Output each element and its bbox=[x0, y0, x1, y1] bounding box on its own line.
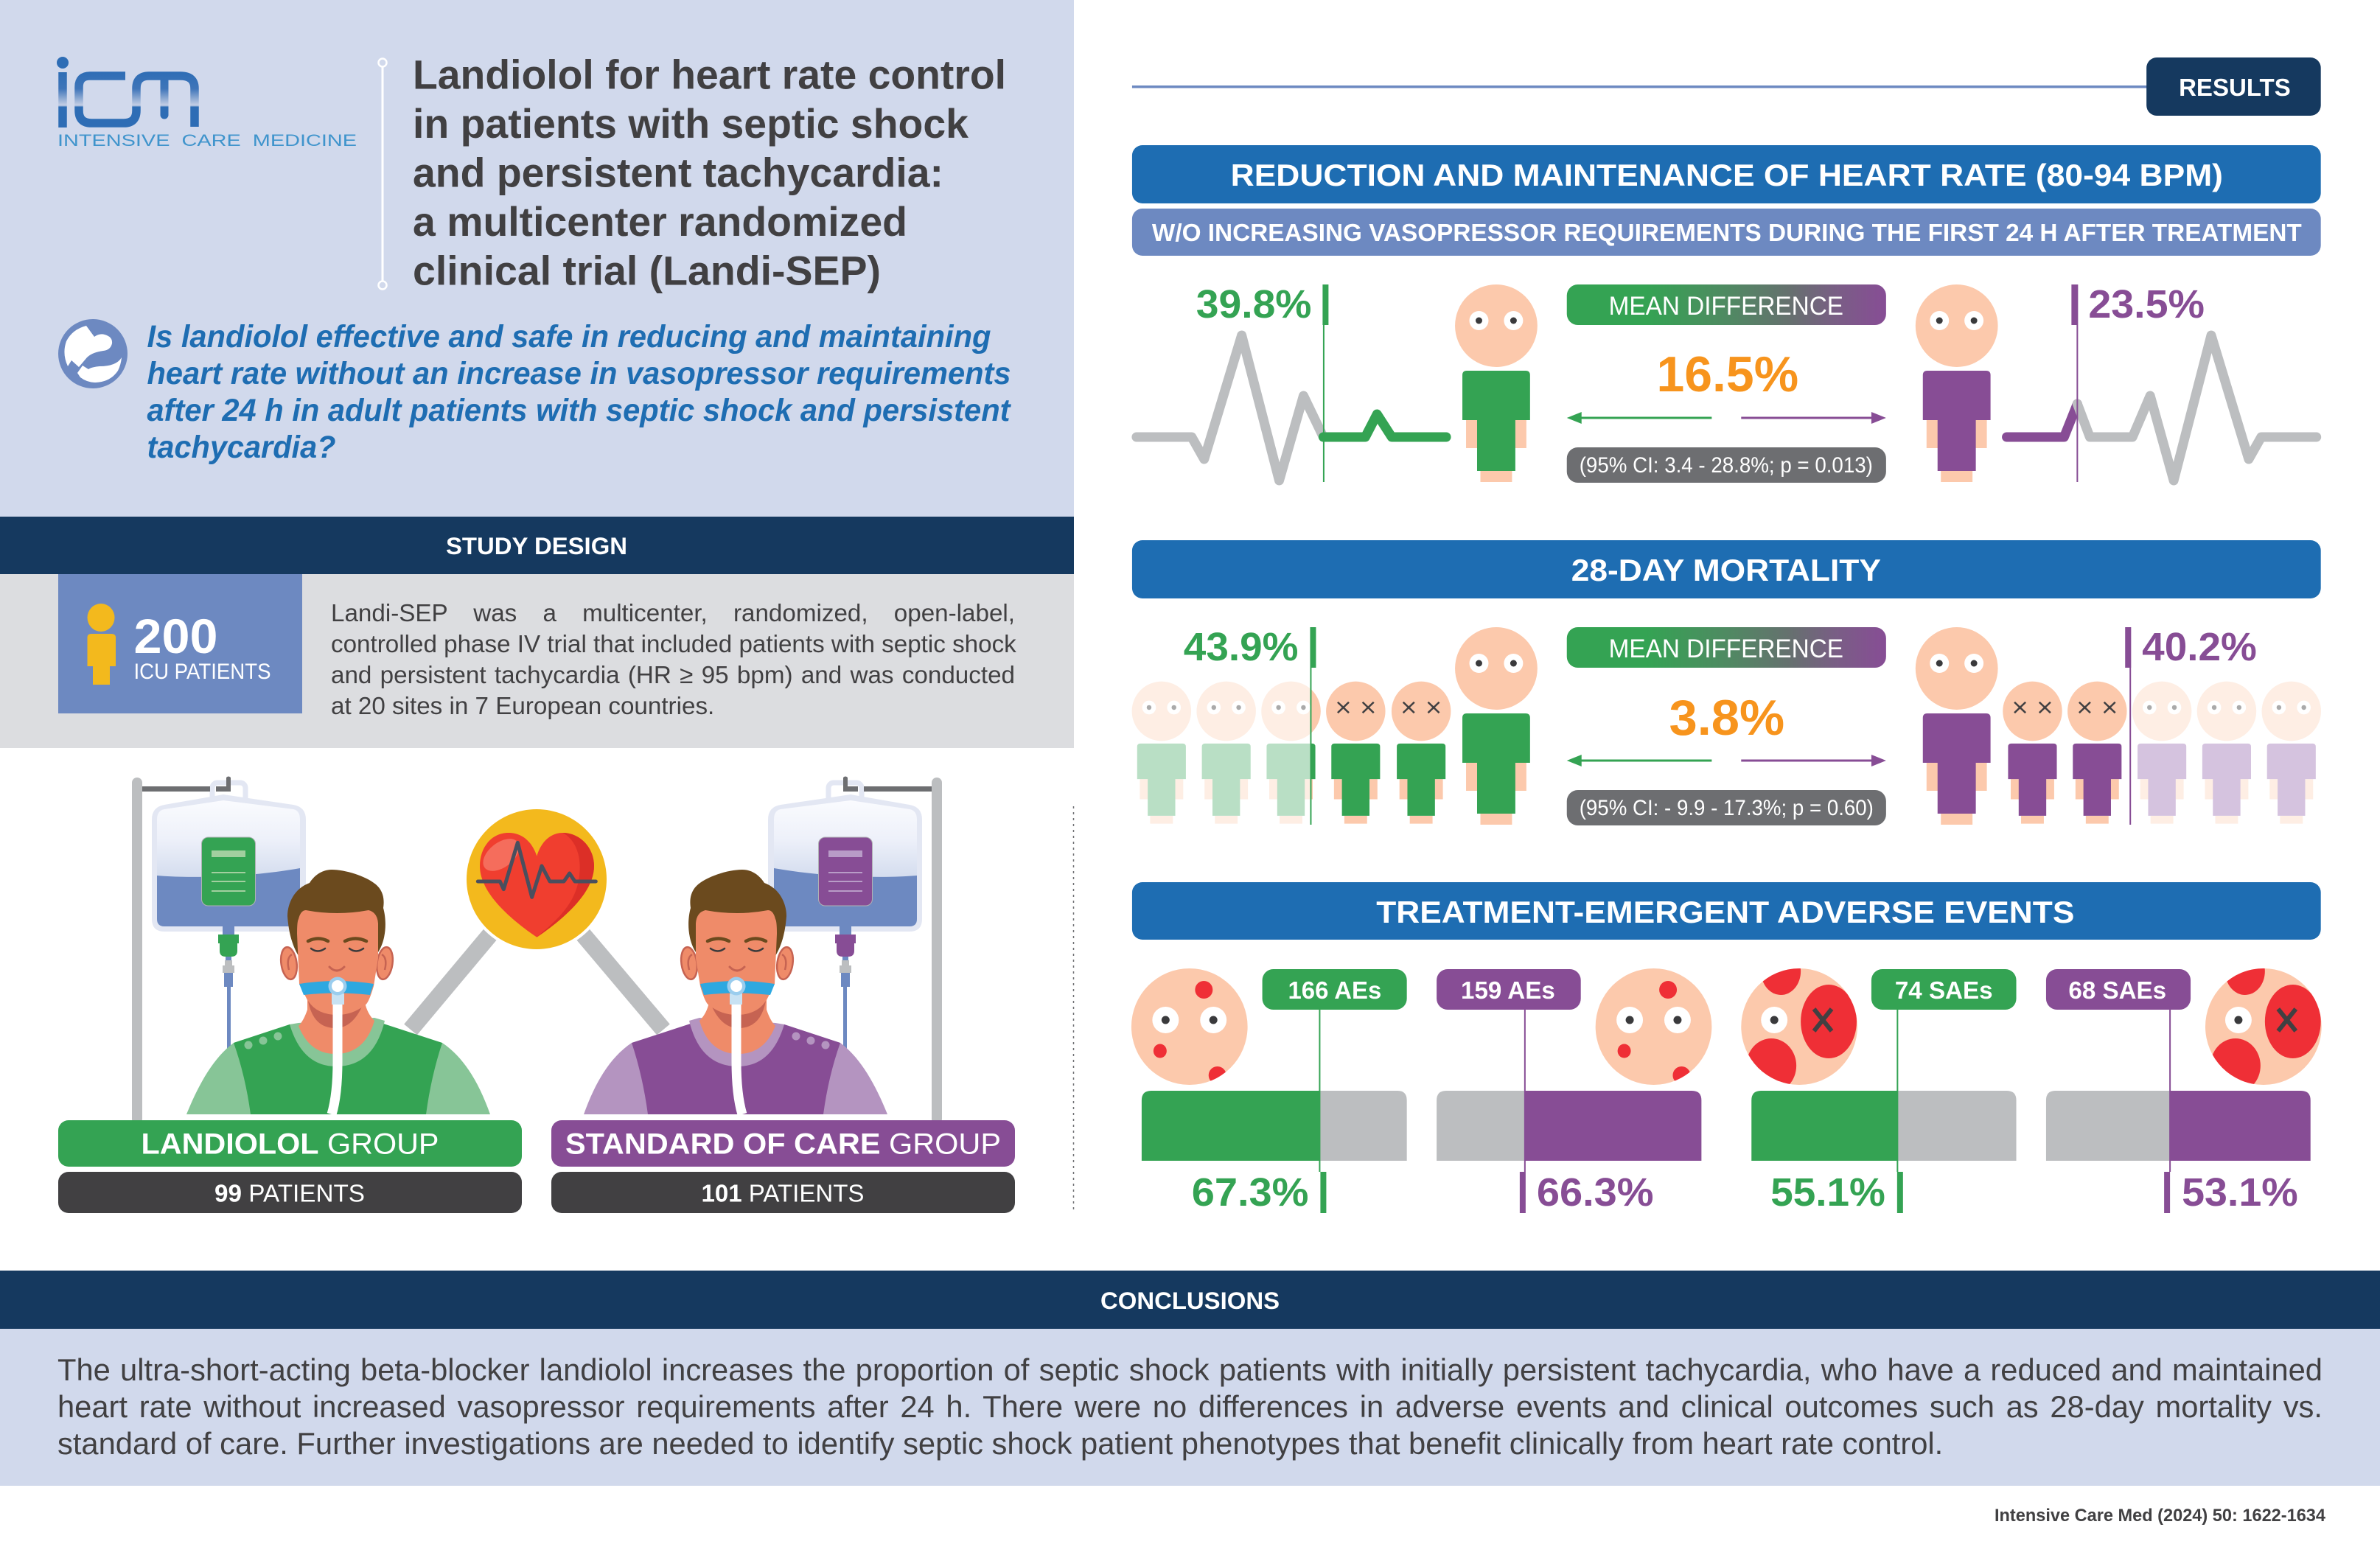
text: study description: and persistent tachycardia (HR ≥ 95 bpm) and was conducted bbox=[331, 662, 1015, 688]
title divider bbox=[379, 59, 386, 289]
callout: heart rate mean difference: (95% CI: 3.4 - 28.8%; p = 0.013) bbox=[1580, 453, 1873, 478]
stat: 200 ICU patients: ICU PATIENTS bbox=[134, 660, 271, 684]
text: study description bbox=[331, 598, 1016, 724]
illustration: landiolol patient with infusion bbox=[132, 777, 490, 1124]
text: conclusions: standard of care. Further investigations are needed to identify septic shock patient phenotypes that benefit clinically from heart rate control. bbox=[57, 1425, 1943, 1461]
pictogram: landiolol mortality: 43.9% bbox=[1184, 625, 1298, 669]
heading: heart rate reduction: REDUCTION AND MAINTENANCE OF HEART RATE (80-94 BPM) bbox=[1231, 158, 2223, 192]
title: Landiolol for heart rate control bbox=[413, 52, 1006, 97]
chart: landiolol heart rate ECG bbox=[1137, 282, 1446, 482]
callout: heart rate mean difference bbox=[1567, 284, 1886, 483]
stat: 200 ICU patients: 200 bbox=[134, 609, 218, 663]
citation: Intensive Care Med (2024) 50: 1622-1634 bbox=[1995, 1506, 2326, 1526]
text: study description: Landi-SEP was a multicenter, randomized, open-label, bbox=[331, 600, 1015, 626]
research question: heart rate without an increase in vasopressor requirements bbox=[147, 357, 1011, 391]
group size: 99 patients: 99 PATIENTS bbox=[214, 1179, 365, 1207]
heading: treatment-emergent adverse events bbox=[1132, 882, 2321, 940]
adverse events: landiolol: 67.3% bbox=[1192, 1170, 1308, 1215]
group size: 99 patients bbox=[58, 1172, 522, 1213]
adverse events: standard of care bbox=[1437, 968, 1711, 1215]
logo: ICM Intensive Care Medicine: INTENSIVE CARE MEDICINE bbox=[57, 131, 357, 150]
chart: standard of care heart rate ECG: 23.5% bbox=[2088, 282, 2205, 326]
connector bars to heart bbox=[411, 935, 663, 1030]
adverse events: landiolol bbox=[1131, 968, 1407, 1215]
adverse events: standard of care: 159 AEs bbox=[1461, 977, 1555, 1004]
title bbox=[413, 52, 1006, 293]
figure: standard of care patient bbox=[1916, 284, 1998, 482]
callout: mortality mean difference bbox=[1567, 627, 1886, 825]
subheading: vasopressor requirements bbox=[1132, 209, 2321, 256]
adverse events: standard of care: 66.3% bbox=[1537, 1170, 1654, 1215]
panel: conclusions background bbox=[0, 1329, 2380, 1486]
title: in patients with septic shock bbox=[413, 101, 969, 147]
text: study description: controlled phase IV trial that included patients with septic shock bbox=[331, 631, 1016, 657]
research question: Is landiolol effective and safe in reducing and maintaining bbox=[147, 320, 991, 354]
text: study description: at 20 sites in 7 European countries. bbox=[331, 693, 714, 719]
serious adverse events: landiolol: 55.1% bbox=[1770, 1170, 1885, 1215]
pictogram: standard of care mortality: 40.2% bbox=[2142, 625, 2257, 669]
serious adverse events: landiolol: 74 SAEs bbox=[1895, 977, 1993, 1004]
serious adverse events: standard of care: 68 SAEs bbox=[2068, 977, 2166, 1004]
heading: study design bbox=[0, 517, 1074, 575]
figure: landiolol patient, mortality bbox=[1455, 627, 1538, 825]
heading: 28-day mortality: 28-DAY MORTALITY bbox=[1571, 553, 1881, 587]
chart: landiolol heart rate ECG: 39.8% bbox=[1196, 282, 1311, 326]
pictogram: landiolol mortality bbox=[1132, 625, 1451, 825]
title: a multicenter randomized bbox=[413, 199, 907, 245]
text: conclusions: heart rate without increased vasopressor requirements after 24 h. There were no differences in adverse events and clinical outcomes such as 28-day mortality vs. bbox=[57, 1388, 2323, 1424]
results tag and rule: RESULTS bbox=[2179, 74, 2291, 101]
group label: standard of care: STANDARD OF CARE GROUP bbox=[565, 1128, 1001, 1160]
panel: study design summary bbox=[0, 574, 1074, 748]
serious adverse events: standard of care: 53.1% bbox=[2182, 1170, 2298, 1215]
panel: header background bbox=[0, 0, 1074, 517]
figure: landiolol patient bbox=[1455, 284, 1538, 482]
illustration: standard of care patient with infusion bbox=[584, 777, 942, 1124]
text: conclusions: The ultra-short-acting beta-blocker landiolol increases the proportion of septic shock patients with initially persistent tachycardia, who have a reduced and maintained bbox=[57, 1352, 2323, 1387]
heading: 28-day mortality bbox=[1132, 540, 2321, 598]
stat: 200 ICU patients bbox=[58, 574, 302, 713]
title: clinical trial (Landi-SEP) bbox=[413, 248, 881, 293]
callout: heart rate mean difference: 16.5% bbox=[1657, 347, 1798, 402]
group label: landiolol bbox=[58, 1120, 522, 1167]
serious adverse events: landiolol bbox=[1741, 948, 2017, 1215]
research question bbox=[147, 320, 1011, 465]
results tag and rule bbox=[1132, 57, 2321, 116]
icon: question circle bbox=[58, 319, 128, 388]
text: conclusions bbox=[57, 1352, 2329, 1462]
chart: standard of care heart rate ECG bbox=[2007, 282, 2317, 482]
heading: conclusions bbox=[0, 1271, 2380, 1329]
research question: tachycardia? bbox=[147, 430, 336, 465]
heading: treatment-emergent adverse events: TREATMENT-EMERGENT ADVERSE EVENTS bbox=[1376, 895, 2074, 929]
group size: 101 patients: 101 PATIENTS bbox=[702, 1179, 864, 1207]
icon: heart with ECG bbox=[464, 806, 610, 952]
title: and persistent tachycardia: bbox=[413, 150, 943, 196]
heading: study design: STUDY DESIGN bbox=[446, 533, 627, 559]
adverse events: landiolol: 166 AEs bbox=[1288, 977, 1381, 1004]
figure: standard of care patient, mortality bbox=[1916, 627, 1998, 825]
group label: standard of care bbox=[551, 1120, 1015, 1167]
research question: after 24 h in adult patients with septic shock and persistent bbox=[147, 394, 1011, 428]
group label: landiolol: LANDIOLOL GROUP bbox=[142, 1128, 439, 1160]
group size: 101 patients bbox=[551, 1172, 1015, 1213]
serious adverse events: standard of care bbox=[2046, 948, 2322, 1215]
pictogram: standard of care mortality bbox=[2003, 625, 2321, 825]
callout: mortality mean difference: (95% CI: - 9.9 - 17.3%; p = 0.60) bbox=[1580, 796, 1874, 820]
subheading: vasopressor requirements: W/O INCREASING VASOPRESSOR REQUIREMENTS DURING THE FIRST 24 H AFTER TREATMENT bbox=[1152, 219, 2302, 246]
heading: conclusions: CONCLUSIONS bbox=[1100, 1288, 1280, 1314]
callout: mortality mean difference: 3.8% bbox=[1669, 691, 1784, 746]
heading: heart rate reduction bbox=[1132, 145, 2321, 203]
logo: ICM Intensive Care Medicine bbox=[57, 57, 357, 150]
panel: results bbox=[1131, 57, 2322, 1215]
